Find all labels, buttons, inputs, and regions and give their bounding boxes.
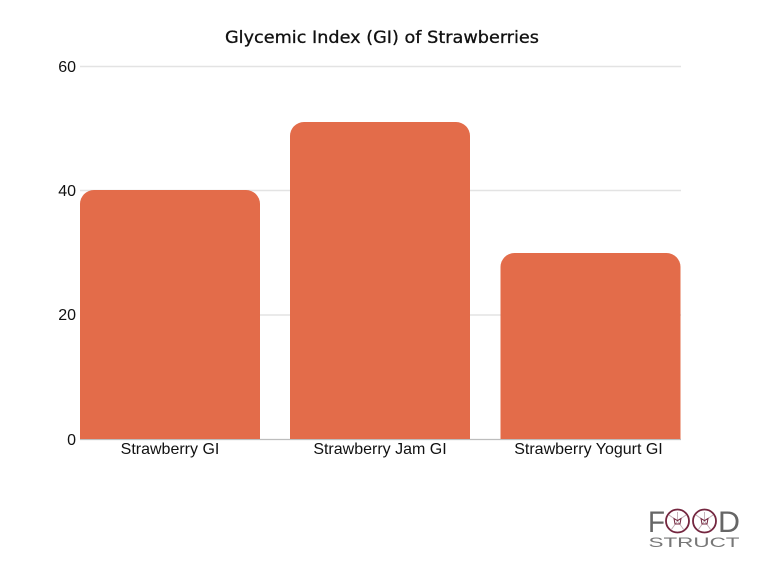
x axis labels xyxy=(121,441,663,458)
bar chart xyxy=(58,59,681,458)
icon: right strawberry slice xyxy=(693,510,716,532)
grid lines xyxy=(80,66,681,315)
x axis labels: Strawberry GI xyxy=(121,441,219,458)
icon: left strawberry slice xyxy=(666,510,689,532)
logo word: STRUCT: STRUCT xyxy=(648,535,740,550)
x axis labels: Strawberry Jam GI xyxy=(313,441,447,458)
logo: FoodStruct: D xyxy=(718,506,740,539)
y axis labels: 0 xyxy=(67,432,76,449)
title: Glycemic Index (GI) of Strawberries xyxy=(225,28,539,48)
x axis labels: Strawberry Yogurt GI xyxy=(514,441,663,458)
y axis labels: 40 xyxy=(58,183,76,200)
y axis labels: 60 xyxy=(58,59,76,76)
x axis baseline xyxy=(80,438,681,440)
bar: Strawberry GI xyxy=(80,190,260,439)
y axis labels: 20 xyxy=(58,307,76,324)
bar: Strawberry Jam GI xyxy=(290,122,470,439)
logo word: FOOD: F xyxy=(648,506,665,539)
bar: Strawberry Yogurt GI xyxy=(500,253,680,439)
y axis labels xyxy=(58,59,76,449)
logo: FoodStruct xyxy=(648,506,740,550)
